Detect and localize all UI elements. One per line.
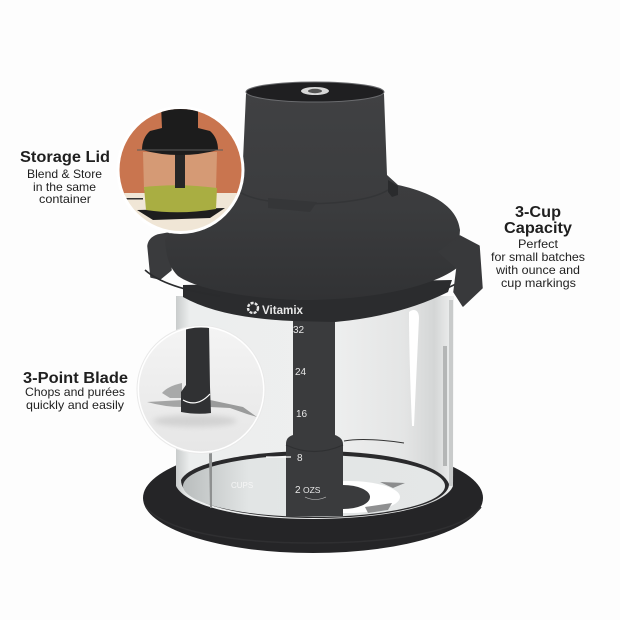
glass jar	[176, 296, 454, 519]
blade	[162, 383, 182, 398]
central shaft with ounce markings: 8	[297, 453, 303, 464]
heading: 3-Cup Capacity: 3-Cup	[515, 204, 561, 221]
callout: Storage Lid	[20, 149, 110, 206]
food in jar	[144, 185, 217, 212]
Vitamix logo: Vitamix	[262, 305, 304, 317]
lid with neck	[165, 94, 460, 300]
lid grip detail	[268, 198, 317, 212]
description: Blend and Store: container	[39, 192, 91, 206]
inset circle: storage lid photo	[120, 109, 244, 234]
central shaft with ounce markings: OZS	[303, 485, 321, 495]
description: small batches	[491, 237, 585, 290]
mat	[137, 208, 225, 220]
description: small batches: Perfect	[518, 237, 559, 251]
right clip	[439, 236, 482, 306]
rubber base	[143, 443, 483, 553]
Vitamix logo	[248, 303, 304, 317]
heading: 3-Cup Capacity	[504, 204, 572, 237]
description: Blend and Store: in the same	[33, 180, 96, 194]
description: chops and purees: Chops and purées	[25, 385, 125, 399]
callout: 3-Cup Capacity	[491, 204, 585, 290]
description: chops and purees	[25, 385, 125, 412]
blade shaft	[181, 326, 211, 414]
neck notch	[388, 180, 398, 197]
central shaft with ounce markings: 16	[296, 409, 308, 420]
mini rim	[137, 150, 223, 151]
jar glass	[143, 152, 217, 190]
neck base shadow	[240, 190, 388, 204]
central shaft with ounce markings: 24	[295, 367, 307, 378]
description: Blend and Store: Blend & Store	[27, 167, 102, 181]
central shaft with ounce markings: CUPS	[231, 481, 253, 490]
rim wire	[145, 270, 458, 296]
heading: Storage Lid: Storage Lid	[20, 149, 110, 166]
description: Blend and Store	[27, 167, 102, 206]
mini shaft	[175, 154, 185, 188]
chute opening	[246, 82, 384, 102]
heading: 3-Cup Capacity: Capacity	[504, 220, 572, 237]
description: small batches: cup markings	[501, 276, 576, 290]
description: small batches: with ounce and	[495, 263, 580, 277]
description: chops and purees: quickly and easily	[26, 398, 124, 412]
mini chopper lid	[142, 105, 218, 155]
heading: 3-Point Blade: 3-Point Blade	[23, 370, 128, 387]
callout: 3-Point Blade	[23, 370, 128, 412]
product: food chopper	[143, 82, 483, 553]
lid underside band	[183, 280, 452, 322]
central shaft with ounce markings: 32	[293, 325, 305, 336]
central shaft with ounce markings	[231, 315, 343, 517]
central shaft with ounce markings: 2	[295, 485, 301, 496]
inset circle: blade close-up	[135, 325, 267, 455]
description: small batches: for small batches	[491, 250, 585, 264]
left clip	[148, 233, 171, 279]
